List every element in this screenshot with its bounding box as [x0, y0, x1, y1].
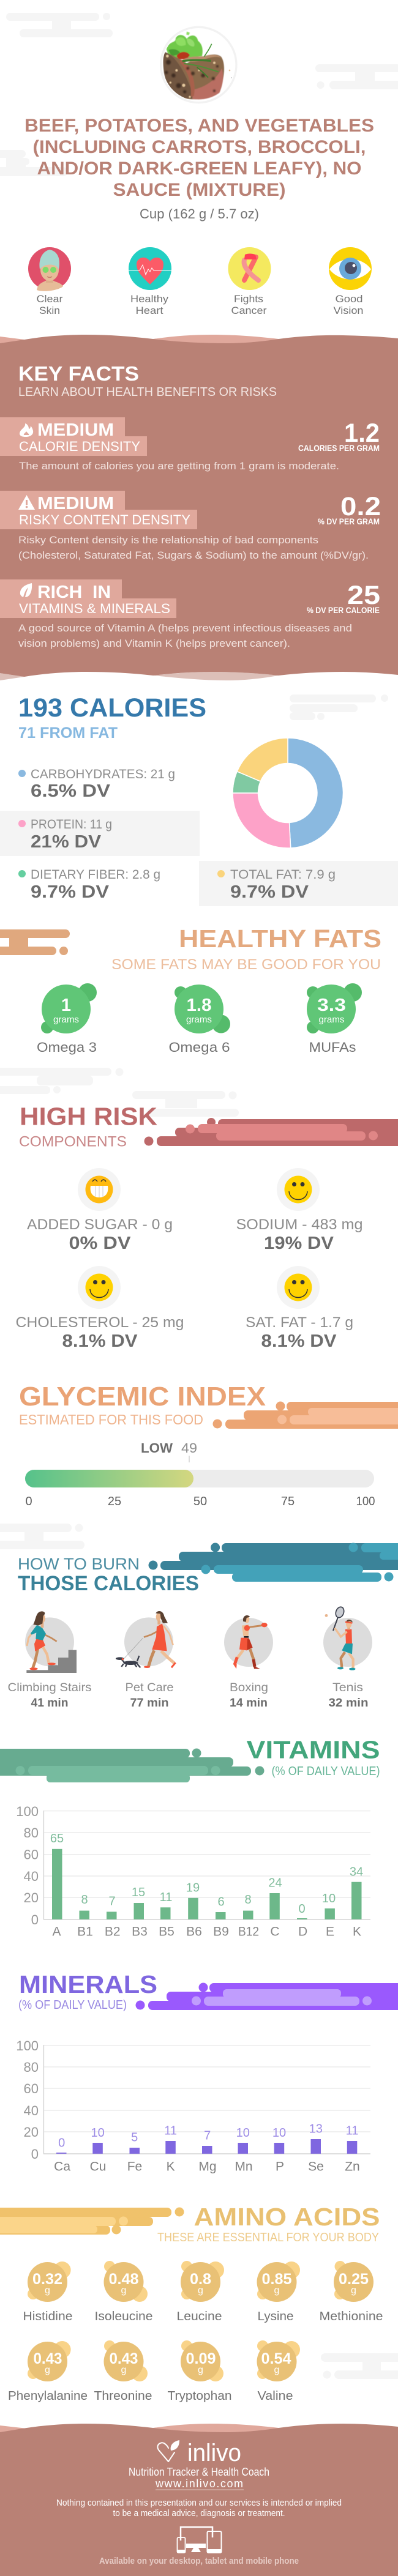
legend: carbohydrates: [18, 767, 175, 801]
bar chart: vitamins: [16, 1804, 370, 1938]
legend: dietary fiber: 9.7% DV: [31, 882, 110, 902]
bar chart: vitamins: 24: [268, 1876, 282, 1889]
bar chart: minerals: Zn: [345, 2160, 360, 2173]
fact: rich in vitamins and minerals: vision problems) and Vitamin K (helps prevent cancer).: [18, 638, 290, 649]
subheading: vitamins: (% OF DAILY VALUE): [272, 1765, 380, 1778]
fact: risky content density: Risky Content density is the relationship of bad components: [18, 534, 318, 546]
amino: lysine: g: [274, 2285, 279, 2296]
exercise: tennis: [323, 1606, 372, 1710]
amino: leucine: 0.8: [190, 2271, 211, 2288]
risk: added sugar: 0% DV: [69, 1234, 131, 1253]
bar chart: minerals: K: [167, 2160, 175, 2173]
bar chart: minerals: 11: [164, 2124, 177, 2138]
heading: key facts: KEY FACTS: [18, 362, 139, 385]
amino: phenylalanine: g: [45, 2365, 50, 2375]
risk: sodium: 19% DV: [264, 1234, 334, 1253]
risk: saturated fat: [246, 1266, 353, 1351]
benefit: healthy heart: Heart: [136, 305, 163, 316]
subheading: components: COMPONENTS: [19, 1133, 127, 1150]
glycemic index gauge: [25, 1440, 375, 1508]
amino: methionine: 0.25: [339, 2271, 369, 2288]
amino: methionine: [320, 2261, 383, 2323]
bar chart: minerals: 10: [236, 2126, 250, 2140]
legend: total fat: 9.7% DV: [230, 882, 309, 902]
icon: devices: [177, 2527, 222, 2553]
benefit: good vision: Good: [336, 293, 362, 305]
bar chart: minerals: 10: [272, 2126, 286, 2140]
bar chart: vitamins: E: [326, 1925, 334, 1938]
title: BEEF, POTATOES, AND VEGETABLES: [24, 116, 374, 136]
heading: those calories: THOSE CALORIES: [18, 1572, 199, 1595]
serving size: Cup (162 g / 5.7 oz): [140, 206, 259, 221]
website: www.inlivo.com: [155, 2477, 243, 2490]
benefit: fights cancer: [228, 247, 271, 316]
bar chart: minerals: Ca: [54, 2160, 70, 2173]
risk: added sugar: ADDED SUGAR - 0 g: [27, 1216, 173, 1233]
amino: threonine: [94, 2340, 152, 2403]
bar chart: vitamins: 19: [186, 1881, 200, 1894]
decoration: burn calories: [148, 1543, 398, 1582]
bar chart: vitamins: B2: [105, 1925, 121, 1938]
amino: phenylalanine: 0.43: [33, 2350, 62, 2367]
glycemic index gauge: 50: [193, 1495, 207, 1508]
bar chart: vitamins: B9: [213, 1925, 229, 1938]
amino: phenylalanine: [8, 2341, 88, 2403]
amino: lysine: [257, 2261, 300, 2323]
bar chart: vitamins: 10: [322, 1892, 336, 1905]
exercise: tennis: Tenis: [332, 1681, 363, 1694]
legend: carbohydrates: 6.5% DV: [31, 781, 111, 801]
legend: protein: [0, 811, 200, 856]
fact: risky content density: (Cholesterol, Saturated Fat, Sugars & Sodium) to the amount (%DV/gr).: [18, 549, 369, 561]
amino: valine: 0.54: [261, 2350, 291, 2367]
fact: risky content density: [0, 491, 381, 561]
subheading: healthy fats: SOME FATS MAY BE GOOD FOR YOU: [111, 956, 381, 973]
fat: omega 3: grams: [53, 1014, 79, 1025]
bar chart: minerals: 0: [31, 2146, 39, 2162]
risk: saturated fat: 8.1% DV: [261, 1331, 337, 1351]
bar chart: vitamins: 8: [81, 1893, 88, 1907]
amino: tryptophan: [168, 2340, 231, 2403]
amino: histidine: Histidine: [23, 2310, 72, 2323]
amino: valine: [257, 2340, 300, 2403]
amino: leucine: g: [198, 2285, 203, 2296]
bar chart: minerals: [16, 2038, 370, 2173]
title: (INCLUDING CARROTS, BROCCOLI,: [33, 137, 366, 157]
benefit: fights cancer: Fights: [234, 293, 263, 305]
heading: minerals: MINERALS: [19, 1970, 157, 1998]
exercise: pet care: [116, 1611, 176, 1710]
heading: how to burn: HOW TO BURN: [18, 1555, 140, 1573]
decoration: vitamins: [0, 1749, 265, 1782]
bar chart: minerals: 5: [131, 2131, 138, 2145]
amino: isoleucine: 0.48: [109, 2271, 139, 2288]
exercise: pet care: Pet Care: [125, 1681, 174, 1694]
title: SAUCE (MIXTURE): [113, 180, 285, 200]
bar chart: minerals: 10: [91, 2126, 105, 2140]
fact: calorie density: CALORIES PER GRAM: [298, 444, 380, 453]
footer panel: [0, 2424, 398, 2576]
bar chart: vitamins: K: [353, 1925, 361, 1938]
title: [24, 116, 374, 200]
risk: cholesterol: CHOLESTEROL - 25 mg: [16, 1314, 184, 1331]
fact: calorie density: The amount of calories you are getting from 1 gram is moderate.: [19, 460, 339, 472]
amino: threonine: 0.43: [109, 2350, 138, 2367]
benefit: clear skin: Skin: [39, 305, 60, 316]
heading: high risk: HIGH RISK: [20, 1103, 157, 1131]
amino: leucine: [176, 2261, 224, 2323]
risk: added sugar: [27, 1168, 173, 1253]
benefit: clear skin: [28, 247, 71, 316]
legend: dietary fiber: DIETARY FIBER: 2.8 g: [31, 868, 160, 882]
fat: omega 6: grams: [186, 1014, 212, 1025]
amino: leucine: Leucine: [176, 2310, 222, 2323]
bar chart: minerals: Mg: [198, 2160, 217, 2173]
bar chart: minerals: P: [276, 2160, 284, 2173]
amino: isoleucine: Isoleucine: [94, 2310, 153, 2323]
bar chart: vitamins: B5: [159, 1925, 175, 1938]
bar chart: minerals: Cu: [90, 2160, 106, 2173]
decoration: healthy fats: [0, 929, 70, 955]
bar chart: vitamins: 100: [16, 1804, 39, 1819]
heading: calories: 193 CALORIES: [18, 693, 206, 723]
logo: inlivo: inlivo: [187, 2440, 241, 2466]
exercise: climbing stairs: 41 min: [31, 1697, 69, 1710]
fat: mufas: [307, 983, 362, 1055]
bar chart: vitamins: 6: [217, 1896, 225, 1909]
benefit: good vision: Vision: [333, 305, 364, 316]
fat: omega 6: [169, 985, 230, 1055]
amino: phenylalanine: Phenylalanine: [8, 2389, 88, 2403]
bar chart: vitamins: 11: [160, 1891, 172, 1904]
risk: cholesterol: [16, 1266, 184, 1351]
fat: mufas: MUFAs: [309, 1040, 356, 1055]
bar chart: vitamins: 0: [298, 1902, 306, 1916]
glycemic index gauge: 0: [25, 1495, 32, 1508]
availability note: Available on your desktop, tablet and mobile phone: [99, 2556, 299, 2566]
subheading: minerals: (% OF DAILY VALUE): [18, 1998, 127, 2012]
bar chart: minerals: 13: [309, 2123, 323, 2136]
amino: methionine: g: [351, 2285, 356, 2296]
heading: vitamins: VITAMINS: [246, 1735, 380, 1763]
amino: lysine: 0.85: [262, 2271, 292, 2288]
amino: tryptophan: g: [198, 2365, 203, 2375]
title: AND/OR DARK-GREEN LEAFY), NO: [37, 158, 361, 179]
decoration: high risk: [145, 1118, 398, 1146]
legend: total fat: TOTAL FAT: 7.9 g: [230, 868, 336, 882]
bar chart: minerals: 11: [346, 2124, 358, 2138]
benefit: healthy heart: [129, 247, 171, 316]
fact: risky content density: RISKY CONTENT DENSITY: [19, 512, 190, 527]
decoration: amino acids: [0, 2208, 184, 2235]
amino: tryptophan: 0.09: [186, 2350, 216, 2367]
bar chart: minerals: 40: [24, 2103, 39, 2118]
glycemic index gauge: LOW: [141, 1440, 173, 1456]
bar chart: vitamins: 15: [132, 1886, 145, 1899]
fact: rich in vitamins and minerals: A good source of Vitamin A (helps prevent infectious diseases and: [18, 622, 352, 634]
risk: cholesterol: 8.1% DV: [62, 1331, 138, 1351]
fact: rich in vitamins and minerals: [0, 579, 380, 649]
bar chart: vitamins: C: [270, 1925, 280, 1938]
glycemic index gauge: 100: [356, 1495, 375, 1508]
exercise: climbing stairs: [7, 1611, 92, 1710]
legend: dietary fiber: [18, 868, 160, 902]
disclaimer: [56, 2498, 342, 2518]
exercise: tennis: 32 min: [328, 1697, 369, 1710]
bar chart: vitamins: 80: [24, 1825, 39, 1841]
glycemic index gauge: 75: [281, 1495, 295, 1508]
fact: rich in vitamins and minerals: VITAMINS & MINERALS: [19, 601, 170, 616]
bar chart: minerals: 80: [24, 2060, 39, 2075]
amino: histidine: 0.32: [32, 2271, 62, 2288]
glycemic index gauge: 25: [108, 1495, 121, 1508]
amino: histidine: g: [45, 2285, 50, 2296]
fact: rich in vitamins and minerals: RICH IN: [37, 583, 111, 602]
amino: threonine: Threonine: [94, 2389, 152, 2403]
decoration: minerals: [136, 1982, 398, 2010]
amino: threonine: g: [121, 2365, 126, 2375]
donut chart: macronutrients: [233, 738, 343, 848]
exercise: boxing: Boxing: [230, 1681, 268, 1694]
subheading: key facts: LEARN ABOUT HEALTH BENEFITS OR RISKS: [18, 385, 277, 399]
heading: glycemic index: GLYCEMIC INDEX: [19, 1382, 266, 1412]
risk: saturated fat: SAT. FAT - 1.7 g: [246, 1314, 353, 1331]
bar chart: vitamins: 60: [24, 1847, 39, 1863]
disclaimer: to be a medical advice, diagnosis or treatment.: [113, 2508, 285, 2518]
bar chart: vitamins: B12: [238, 1925, 259, 1938]
risk: sodium: SODIUM - 483 mg: [236, 1216, 362, 1233]
bar chart: vitamins: B6: [186, 1925, 202, 1938]
bar chart: vitamins: 0: [31, 1912, 39, 1927]
legend: total fat: [199, 861, 398, 906]
exercise: boxing: 14 min: [230, 1697, 268, 1710]
amino: tryptophan: Tryptophan: [168, 2389, 231, 2403]
benefit: good vision: [329, 247, 372, 316]
bar chart: vitamins: 7: [108, 1894, 116, 1908]
amino: isoleucine: [94, 2261, 153, 2323]
benefit: fights cancer: Cancer: [231, 305, 267, 316]
legend: protein: PROTEIN: 11 g: [31, 817, 112, 832]
fact: rich in vitamins and minerals: % DV PER CALORIE: [307, 606, 380, 615]
bar chart: vitamins: 40: [24, 1869, 39, 1884]
decoration: glycemic index: [213, 1401, 398, 1429]
fact: calorie density: 1.2: [344, 419, 380, 448]
exercise: climbing stairs: Climbing Stairs: [7, 1681, 92, 1694]
legend: carbohydrates: CARBOHYDRATES: 21 g: [31, 767, 175, 781]
subheading: calories from fat: 71 FROM FAT: [18, 724, 118, 742]
bar chart: minerals: 0: [58, 2137, 65, 2150]
amino: valine: g: [274, 2365, 279, 2375]
subheading: glycemic index: ESTIMATED FOR THIS FOOD: [19, 1412, 203, 1428]
glycemic index gauge: 49: [181, 1440, 197, 1456]
benefit: clear skin: Clear: [37, 293, 63, 305]
amino: histidine: [23, 2261, 72, 2323]
fact: risky content density: MEDIUM: [37, 494, 114, 513]
amino: lysine: Lysine: [257, 2310, 294, 2323]
fat: omega 6: Omega 6: [169, 1040, 230, 1055]
fact: calorie density: MEDIUM: [37, 420, 114, 440]
bar chart: minerals: 60: [24, 2081, 39, 2096]
fat: omega 3: [37, 983, 97, 1055]
fact: risky content density: 0.2: [340, 492, 381, 521]
bar chart: vitamins: 8: [244, 1893, 252, 1907]
risk: sodium: [236, 1168, 362, 1253]
amino: methionine: Methionine: [320, 2310, 383, 2323]
fact: calorie density: [0, 417, 380, 472]
logo: inlivo: [157, 2440, 241, 2466]
amino: isoleucine: g: [121, 2285, 126, 2296]
heading: amino acids: AMINO ACIDS: [193, 2203, 380, 2231]
bar chart: vitamins: B1: [77, 1925, 93, 1938]
fat: mufas: grams: [318, 1014, 344, 1025]
bar chart: vitamins: B3: [132, 1925, 148, 1938]
benefit: healthy heart: Healthy: [130, 293, 169, 305]
heading: healthy fats: HEALTHY FATS: [179, 925, 381, 953]
bar chart: minerals: Fe: [127, 2160, 142, 2173]
bar chart: minerals: 20: [24, 2124, 39, 2140]
panel: key facts: [0, 335, 398, 680]
fat: omega 6: 1.8: [186, 996, 212, 1015]
fat: omega 3: Omega 3: [37, 1040, 97, 1055]
exercise: boxing: [224, 1615, 273, 1710]
bar chart: minerals: Se: [308, 2160, 324, 2173]
bar chart: vitamins: D: [298, 1925, 307, 1938]
food photo: [161, 27, 236, 103]
amino: valine: Valine: [257, 2389, 293, 2403]
fat: mufas: 3.3: [317, 996, 346, 1015]
bar chart: vitamins: 34: [350, 1865, 363, 1878]
subheading: amino acids: THESE ARE ESSENTIAL FOR YOUR BODY: [157, 2231, 379, 2244]
bar chart: vitamins: 20: [24, 1890, 39, 1905]
disclaimer: Nothing contained in this presentation and our services is intended or implied: [56, 2498, 342, 2508]
fact: rich in vitamins and minerals: 25: [347, 581, 380, 610]
bar chart: vitamins: 65: [50, 1832, 64, 1845]
legend: protein: 21% DV: [31, 832, 102, 852]
exercise: pet care: 77 min: [130, 1697, 169, 1710]
bar chart: vitamins: A: [52, 1925, 61, 1938]
tagline: Nutrition Tracker & Health Coach: [129, 2466, 269, 2478]
bar chart: minerals: 100: [16, 2038, 39, 2053]
bar chart: minerals: Mn: [235, 2160, 253, 2173]
fat: omega 3: 1: [61, 996, 71, 1015]
fact: risky content density: % DV PER GRAM: [318, 517, 380, 526]
bar chart: minerals: 7: [204, 2129, 211, 2142]
fact: calorie density: CALORIE DENSITY: [19, 439, 140, 454]
